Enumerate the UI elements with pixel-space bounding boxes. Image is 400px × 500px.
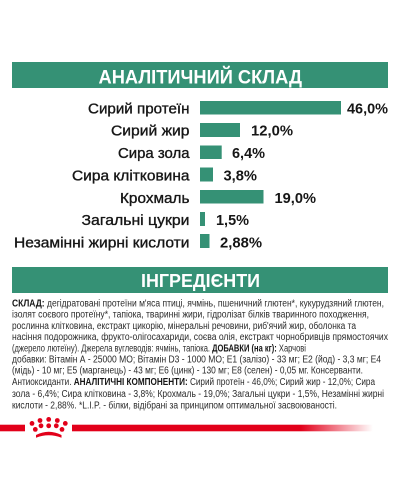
text block: ingredients list: Антиоксиданти. АНАЛІТИЧНІ КОМПОНЕНТИ: Сирий протеїн - 46,0%; Сирий жир - 12,0%; Сира [12,377,376,388]
bar chart: analytical components [14,101,388,251]
panel: ingredients heading [12,267,388,293]
text block: ingredients list: рослинна клітковина, екстракт цикорію, мінеральні речовини, риб'ячий жир, оболонка та [12,321,357,332]
row: starch: 19,0% [274,191,316,207]
row: crude ash: 6,4% [232,146,265,162]
row: essential fatty acids: 2,88% [220,235,262,251]
row: essential fatty acids [14,234,262,251]
text block: ingredients list: (джерело лютеїну). Джерела вуглеводів: ячмінь, тапіока. ДОБАВКИ (на кг): Харчові [12,343,306,354]
text block: ingredients list: кислоти - 2,88%. *L.I.P. - білки, відібрані за принципом оптимальної засвоюваності. [12,400,337,411]
row: crude protein [88,101,388,117]
row: crude fat: Сирий жир [111,124,190,140]
panel: analytical composition heading [12,62,388,88]
row: crude ash: Сира зола [118,146,190,162]
title: ingredients: ІНГРЕДІЄНТИ [141,271,260,291]
icon: royal canin crown [30,417,68,438]
row: crude protein: 46,0% [347,101,388,117]
red band [0,425,373,431]
row: total sugars [82,212,249,229]
title: analytical composition: АНАЛІТИЧНИЙ СКЛАД [98,66,302,88]
row: crude fibre: 3,8% [224,168,257,184]
row: crude fibre: Сира клітковина [72,168,190,184]
row: starch: Крохмаль [120,191,190,207]
text block: ingredients list [12,298,388,411]
row: essential fatty acids: Незамінні жирні кислоти [14,235,190,251]
row: crude protein: Сирий протеїн [88,101,190,117]
row: crude ash [118,146,265,162]
row: crude fat: 12,0% [251,124,293,140]
row: total sugars: Загальні цукри [82,213,190,229]
row: crude fat [111,123,293,140]
row: starch [120,190,316,207]
row: crude fibre [72,168,257,184]
row: total sugars: 1,5% [216,213,249,229]
